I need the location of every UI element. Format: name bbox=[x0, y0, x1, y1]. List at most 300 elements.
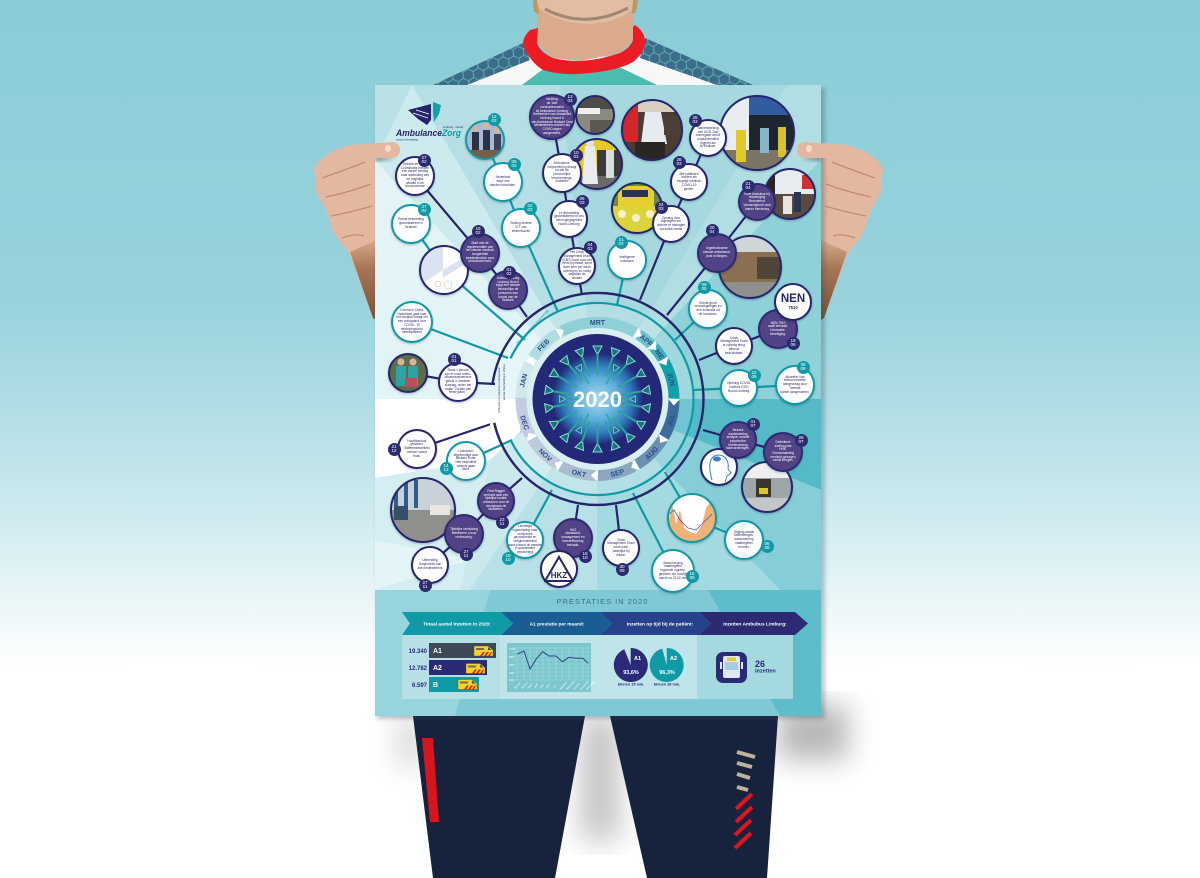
event 30/09 bbox=[602, 529, 640, 567]
photo: ambulance with protective suits bbox=[578, 140, 621, 188]
text: 28 bbox=[692, 114, 698, 120]
text: 06 bbox=[764, 540, 770, 546]
event 02/03: Sluiting diverse bbox=[510, 221, 532, 225]
event corona in China: verdrijvingsvoor bbox=[401, 327, 423, 331]
event 16/09: gesloten om huurlijk bbox=[659, 572, 687, 576]
ambubus count: inzetten bbox=[755, 668, 776, 674]
event crisis management team bbox=[715, 327, 753, 365]
event crisis management team: beschikbaar. bbox=[725, 351, 743, 355]
event 30/09: elkaar. bbox=[616, 553, 626, 557]
event 14/12: Lockdown: bbox=[458, 449, 474, 453]
event 04/03: situatie bbox=[572, 276, 582, 280]
event 28/07: Definitieve bbox=[776, 440, 790, 444]
event 22/06 bbox=[720, 369, 758, 407]
event 24/03: ingelegers om bbox=[661, 219, 681, 223]
event 19/02: Start met de bbox=[471, 241, 489, 245]
event 23/11: verhuist naar een bbox=[484, 493, 508, 497]
event 27/02 besmetting: 27 bbox=[421, 204, 427, 208]
event 28/03 samenwerking: ingezet als bbox=[700, 141, 716, 145]
event 28/07: sluiting post bbox=[775, 444, 791, 448]
event 02/03: ziekenhuizen bbox=[512, 229, 530, 233]
photo ring bbox=[741, 461, 793, 513]
year: 2020 bbox=[573, 387, 622, 412]
event 14/12: winkels gaan bbox=[457, 464, 475, 468]
event 27/11 verhuizing: verbouwing. bbox=[455, 535, 473, 539]
pie: A1 bbox=[614, 648, 648, 686]
timeline dial bbox=[489, 291, 706, 507]
event 23/11: nieuwbouw de bbox=[486, 504, 506, 508]
month pointers bbox=[523, 325, 680, 482]
text: 01 bbox=[506, 266, 512, 272]
pie: A2: 96,3% bbox=[659, 670, 675, 676]
event 22/06: 22 bbox=[751, 370, 757, 374]
event 30/06 bbox=[775, 365, 815, 405]
event 06/03: verzorgingsgebied bbox=[556, 218, 582, 222]
event 30/09: Management Team bbox=[607, 541, 635, 545]
logo: AmbulanceZorg bbox=[395, 128, 461, 138]
event 19/10: veiligheidsbeleid bbox=[513, 539, 537, 543]
person: left hand bbox=[314, 150, 376, 320]
event 19/06: Informatie- bbox=[770, 328, 786, 332]
event 01/02: Limburg Noord bbox=[497, 280, 519, 284]
event 10/03: persoonlijke bbox=[553, 172, 570, 176]
event 16/10: management en bbox=[561, 535, 585, 539]
event 16/10: 16 bbox=[582, 550, 588, 556]
event 27/11 uitbreiding: Zorgbureau van bbox=[419, 562, 441, 566]
photo: ambulance interior bbox=[577, 97, 613, 133]
photo ring bbox=[571, 138, 623, 190]
icon: HKZ logo bbox=[540, 550, 578, 588]
event 28/03 samenwerking: ongediversified bbox=[697, 137, 719, 141]
event 24/03: uniform te managen bbox=[657, 223, 685, 227]
event 14/12: 12 bbox=[443, 467, 449, 472]
photo: press conference bbox=[467, 122, 503, 158]
event 28/03 patiënten: COVID-19 bbox=[682, 183, 696, 187]
event 01/07: analyse: sociale bbox=[727, 435, 749, 439]
event 12/03 photo ring bbox=[465, 120, 505, 160]
ring: teal bbox=[510, 303, 693, 495]
photo ring bbox=[719, 95, 795, 171]
event 19/06: NEN 7510 bbox=[771, 321, 785, 325]
section heading: PRESTATIES IN 2020 bbox=[557, 597, 648, 606]
event 22/06: Noord-Limburg. bbox=[728, 389, 750, 393]
month labels: JUL bbox=[667, 412, 677, 428]
line chart: A1 per maand: februari bbox=[520, 680, 529, 690]
line chart: A1 per maand: december bbox=[585, 680, 596, 691]
left finger bbox=[317, 142, 400, 172]
event 01/02: Brabant bbox=[502, 298, 514, 302]
text: 01 bbox=[451, 358, 457, 363]
photo: garage building bbox=[742, 462, 792, 512]
event 28/03 patiënten: Alle patiënten bbox=[679, 172, 699, 176]
event 06/03: Noord-Limburg bbox=[558, 222, 580, 226]
event 14/12: Niet essentiële bbox=[456, 460, 476, 464]
event 27/02 besmetting: Brabant bbox=[405, 225, 417, 229]
event 21/12: gesloten. bbox=[411, 442, 423, 446]
bars: inzetten bbox=[409, 643, 496, 692]
text: 11 bbox=[464, 553, 468, 558]
event 30/06: aangevraag door bbox=[783, 382, 807, 386]
event 27/02 besmetting bbox=[391, 204, 431, 244]
line chart: A1 per maand: 92% bbox=[509, 678, 515, 682]
event 27/02 besmetting: 02 bbox=[421, 208, 427, 213]
line chart: A1 per maand: juli bbox=[551, 683, 557, 689]
event 14/12: Minister Rutte. bbox=[456, 456, 476, 460]
event 21/03: 03 bbox=[618, 241, 624, 246]
event corona in China: Nederland gaat naar bbox=[397, 312, 427, 316]
event 02/03: 03 bbox=[527, 207, 533, 212]
poster background rays bbox=[375, 85, 821, 590]
event 19/02: het nieuwe medisch bbox=[466, 248, 494, 252]
photo ring bbox=[388, 353, 428, 393]
event 06/03: geconstateerd in ons bbox=[554, 214, 584, 218]
event 13/03: Melding bbox=[546, 97, 558, 101]
line chart: A1 per maand: oktober bbox=[572, 682, 581, 691]
photo: office floor bbox=[392, 479, 454, 541]
pie: A1: A1 bbox=[634, 656, 641, 662]
event 21/04: 21 bbox=[745, 180, 751, 186]
event 27/11 uitbreiding bbox=[411, 546, 449, 584]
event 02/03 bbox=[501, 208, 541, 248]
event 30/06: kamer aangenomen. bbox=[780, 390, 810, 394]
photo ring bbox=[764, 168, 816, 220]
icon: ambubus bbox=[716, 652, 747, 683]
event 21/04 bbox=[738, 183, 776, 221]
event 01/07: 01 bbox=[750, 418, 756, 424]
event 27/02 directie: situatie in de bbox=[406, 181, 424, 185]
event 16/09: wacht na 22:00 uur. bbox=[659, 576, 687, 580]
ambubus count: 26 bbox=[755, 659, 765, 669]
event 14/12 bbox=[446, 441, 486, 481]
month labels: JAN bbox=[519, 373, 529, 388]
event 16/09: Aanscherping bbox=[663, 561, 683, 565]
event 27/02 directie: 27 bbox=[421, 154, 427, 160]
event 28/03 patiënten: 03 bbox=[676, 161, 682, 166]
event 28/03 samenwerking: AVRzdiuze. bbox=[700, 144, 716, 148]
event 19/06: 06 bbox=[790, 342, 796, 347]
event 04/03: 03 bbox=[587, 246, 593, 251]
event 23/11: ontworpen voor de bbox=[483, 500, 509, 504]
event 04/03 bbox=[558, 247, 596, 285]
inner pale band bbox=[530, 331, 666, 467]
small vertical note bbox=[497, 364, 506, 413]
text: 11 bbox=[500, 521, 504, 526]
event 04/03: Het Crisis bbox=[570, 250, 584, 254]
line chart: A1 per maand: 94% bbox=[509, 671, 515, 675]
event 19/02 bbox=[460, 233, 500, 273]
event crisis management team: afbouw bbox=[729, 347, 739, 351]
timeline dial: Uitbraak van COVID-19 wereldwijd bbox=[515, 309, 550, 346]
month labels bbox=[518, 320, 677, 480]
event 01/01: beter gaan." bbox=[449, 390, 467, 394]
event 24/03: Opvang voor bbox=[662, 216, 680, 220]
event 01/07: psychische bbox=[730, 439, 746, 443]
event 27/02 directie: een eerste overleg bbox=[402, 169, 428, 173]
event 19/10: verplichting bbox=[517, 550, 533, 554]
event 28/03 patiënten bbox=[670, 163, 708, 201]
line chart: A1 per maand: april bbox=[533, 682, 539, 689]
event 13/03: Gemeenten van Maastricht bbox=[533, 112, 571, 116]
event 21/04: Inzet Ambubus bij bbox=[744, 192, 770, 196]
logo: Limburg - Noord bbox=[443, 125, 464, 129]
event 21/03: Intelligente bbox=[619, 255, 635, 259]
line chart: A1 per maand: september bbox=[565, 679, 576, 691]
illustration ring bbox=[419, 245, 469, 295]
chart ring bbox=[667, 493, 717, 543]
text: 09 bbox=[619, 568, 625, 573]
event 01/07: aanbesteding bbox=[728, 432, 748, 436]
event 20/04: nieuwe ambulance- bbox=[703, 250, 731, 254]
event 22/06: 06 bbox=[751, 374, 757, 379]
event 16/09: 16 bbox=[689, 570, 695, 576]
event 28/07: HHK. bbox=[779, 447, 787, 451]
event 21/03 bbox=[607, 240, 647, 280]
pie: A2 bbox=[650, 648, 684, 686]
event 23/11: faciliteiten. bbox=[488, 507, 504, 511]
text: 06 bbox=[579, 196, 585, 200]
event 28/07 bbox=[763, 432, 803, 472]
event 19/02: beademhuiden voor bbox=[466, 256, 494, 260]
event 27/11 verhuizing bbox=[444, 514, 484, 554]
chevron: op tijd bbox=[600, 612, 711, 635]
event 28/03 samenwerking: toenegaan wordt bbox=[696, 133, 720, 137]
person: trousers bbox=[413, 716, 778, 878]
event 04/03: eerst bij elkaar, komt bbox=[562, 261, 592, 265]
event 21/03: lockdown bbox=[620, 259, 634, 263]
event 22/06: Opening COVID- bbox=[727, 381, 751, 385]
event 16/10: standaard: bbox=[565, 531, 581, 535]
event 01/01: Sinds 1 januari bbox=[447, 368, 469, 372]
text: 24 bbox=[658, 202, 664, 206]
event 30/09: komt weer bbox=[614, 545, 628, 549]
event 27/11 uitbreiding: 27 bbox=[422, 580, 428, 584]
text: 10 bbox=[505, 557, 511, 562]
chevron: A1 per maand bbox=[699, 612, 808, 635]
event 02/03: ICT van bbox=[515, 225, 527, 229]
event 13/03 bbox=[529, 94, 575, 140]
event 01/02: bands van de bbox=[498, 295, 518, 299]
event 27/02 directie: de ongelijke bbox=[406, 177, 424, 181]
event 06/05: verzoekgelegen en bbox=[695, 304, 721, 308]
event 30/06: Wetsvoorstellen bbox=[784, 378, 806, 382]
event 16/10: 10 bbox=[582, 555, 588, 560]
event 01/02: krijgt een nieuwe bbox=[496, 283, 520, 287]
event 28/03 patiënten: gezien. bbox=[684, 187, 694, 191]
event 01/07: 07 bbox=[750, 423, 756, 428]
event 06/08: Stijging aantal bbox=[734, 530, 754, 534]
event 14/12: afgekondigd door bbox=[454, 453, 478, 457]
event 23/11: tijdelijke locatie bbox=[485, 496, 507, 500]
event 04/03: Management Team bbox=[563, 254, 591, 258]
month labels: OKT bbox=[571, 469, 587, 480]
bars: inzetten: A1 bbox=[433, 648, 442, 655]
event 16/10: hercertificering bbox=[563, 539, 583, 543]
line chart: A1 per maand: november bbox=[579, 680, 590, 691]
event 19/02: congenitale bbox=[472, 252, 488, 256]
event 30/09: 30 bbox=[619, 564, 625, 568]
event 20/04: post in Bergen. bbox=[706, 254, 728, 258]
event 19/10: onderzoek bbox=[518, 532, 532, 536]
icon: NEN 7510 bbox=[774, 283, 812, 321]
month labels: SEP bbox=[610, 469, 626, 479]
chart: infection graph bbox=[668, 494, 716, 542]
event 04/03: dagelijks de bbox=[569, 272, 585, 276]
event 27/02 directie: Directie en Crisis bbox=[403, 162, 427, 166]
event 30/06: Akoestiel Van bbox=[785, 375, 805, 379]
event corona in China: Corona in China. bbox=[400, 308, 424, 312]
logo bbox=[395, 102, 464, 142]
text: 01 bbox=[451, 354, 457, 358]
small vertical note: eerste besmetting in China bbox=[502, 364, 506, 400]
pie: A1: binnen 15 min. bbox=[618, 682, 644, 686]
event 21/12: werken vanuit bbox=[407, 450, 427, 454]
photo: two colleagues bbox=[390, 355, 426, 391]
backdrop shadow bbox=[398, 705, 848, 841]
month labels: FEB bbox=[537, 338, 552, 353]
line chart: A1 per maand: maart bbox=[526, 682, 534, 690]
event 13/03: 03 bbox=[567, 98, 573, 103]
event 27/02 directie: Coördinator hebben bbox=[401, 166, 429, 170]
line chart: A1 per maand: augustus bbox=[558, 680, 569, 691]
event 28/03 samenwerking: 03 bbox=[692, 119, 698, 124]
bars: inzetten: 6.597 bbox=[412, 683, 428, 689]
event 04/03: overleg en zo nodig bbox=[563, 269, 591, 273]
event corona in China: een voorgaand voor bbox=[398, 319, 426, 323]
event 19/06: 19 bbox=[790, 338, 796, 342]
chevron: totaal bbox=[402, 612, 513, 635]
icon: head illustration bbox=[700, 448, 738, 486]
logo: zorg in beweging bbox=[396, 138, 418, 142]
text: 02 bbox=[527, 202, 533, 208]
line chart: A1 per maand: 98% bbox=[509, 655, 515, 659]
performance section background bbox=[375, 590, 821, 716]
pie: A1: 93,6% bbox=[623, 670, 639, 676]
event 13/03: van Ambulance Brabant Oost bbox=[531, 120, 573, 124]
bars: inzetten: B bbox=[433, 682, 438, 689]
event 06/05: een evaluatie uit bbox=[696, 308, 720, 312]
event 19/02: implementatie van bbox=[467, 245, 493, 249]
event 16/10: HKZ bbox=[570, 528, 576, 532]
event 24/03: via social media bbox=[660, 227, 682, 231]
event 27/11 verhuizing: Mektheren Locus bbox=[452, 531, 476, 535]
event crisis management team: Management Team bbox=[720, 339, 748, 343]
photo: ambulance post building bbox=[719, 236, 781, 298]
text: 04 bbox=[709, 229, 715, 234]
icon: NEN 7510: 7510 bbox=[788, 305, 798, 310]
event 01/02 bbox=[488, 270, 528, 310]
small vertical note: Uitbraak coronavirus in Nederland bbox=[497, 367, 501, 413]
event 19/06 bbox=[758, 309, 798, 349]
event 13/03: 13 bbox=[567, 94, 573, 98]
event 20/04 bbox=[697, 233, 737, 273]
event 16/09: 09 bbox=[689, 575, 695, 580]
event 12/03 photo ring: 03 bbox=[491, 118, 497, 123]
event 13/03: aangemerkt. bbox=[543, 131, 561, 135]
panels bbox=[402, 635, 793, 699]
event 21/04: kamer Merseveg bbox=[745, 207, 769, 211]
pie: A2: binnen 30 min. bbox=[654, 682, 680, 686]
event 19/10: gezondheids en bbox=[514, 535, 536, 539]
event 01/02: AmbulanceZorg bbox=[497, 276, 519, 280]
event 10/03: bij alle de bbox=[555, 168, 569, 172]
text: 09 bbox=[511, 158, 517, 164]
event 21/12: Staffmedewerkers bbox=[404, 446, 430, 450]
event 01/07 bbox=[719, 421, 757, 459]
event 13/03: bij Ambulance Limburg bbox=[536, 109, 568, 113]
event 28/03 samenwerking: Samenwerking bbox=[697, 126, 719, 130]
chevron: prestatie per maand: A1 prestatie per maand: bbox=[530, 622, 585, 628]
event 19/10: ingeschaling naar bbox=[512, 528, 538, 532]
event 21/04: verpleeging bbox=[749, 195, 765, 199]
event 01/01 bbox=[438, 362, 478, 402]
bars: inzetten: A2 bbox=[433, 665, 442, 672]
photo ring bbox=[611, 182, 663, 234]
event 10/03: hulpverlening draagt bbox=[548, 165, 576, 169]
event 01/07: Bezoek bbox=[733, 428, 743, 432]
event 27/02 directie: naar aanleiding van bbox=[401, 173, 429, 177]
event 28/07: 28 bbox=[798, 434, 804, 440]
event 06/08: maatregelen bbox=[735, 541, 753, 545]
icon: HKZ logo: HKZ bbox=[551, 571, 567, 580]
photo ring bbox=[390, 477, 456, 543]
event 01/07: beeldvorming bbox=[728, 443, 748, 447]
event 09/03: Nederland bbox=[496, 175, 510, 179]
event 14/12: dicht. bbox=[462, 467, 470, 471]
chevron: op tijd: Inzetten op tijd bij de patiënt: bbox=[627, 622, 694, 628]
event 01/01: lancemedewerkers bbox=[445, 375, 471, 379]
event 01/01: geluid in Janssen bbox=[446, 379, 470, 383]
event 21/04: Verwachtpunt Land bbox=[743, 203, 771, 207]
text: 21 bbox=[391, 444, 397, 448]
event 16/10 bbox=[553, 518, 593, 558]
event 09/03: stopt met bbox=[496, 179, 510, 183]
line chart: A1 per maand: mei bbox=[539, 683, 545, 689]
chevron: A1 per maand: Inzetten Ambubus Limburg: bbox=[723, 622, 787, 628]
event 01/07: fasevorderingen. bbox=[726, 446, 750, 450]
event 10/03: 03 bbox=[573, 154, 579, 159]
photo ring bbox=[575, 95, 615, 135]
poster shadow bbox=[377, 88, 825, 719]
event 27/02 directie: 02 bbox=[421, 159, 427, 164]
text: 12 bbox=[391, 448, 397, 453]
event 19/10: aans placed de meeste bbox=[509, 543, 541, 547]
photo: ambubus outside bbox=[765, 169, 815, 219]
month arcs bbox=[489, 291, 706, 507]
event 27/11 uitbreiding: alle medewerkers bbox=[418, 566, 442, 570]
event 06/05: de lockdown. bbox=[699, 312, 717, 316]
event 13/03: de 1ste bbox=[547, 101, 557, 105]
event 06/08: besmettingen, bbox=[734, 533, 754, 537]
chevron: totaal: Totaal aantal inzetten in 2020: bbox=[423, 622, 491, 628]
virus centre bbox=[532, 334, 662, 464]
event 24/03 bbox=[652, 205, 690, 243]
pie: A2: A2 bbox=[670, 656, 677, 662]
event 04/03: twee keer per week bbox=[563, 265, 591, 269]
event 28/07: Overschakeling bbox=[772, 451, 794, 455]
event 16/10: behaald. bbox=[567, 543, 579, 547]
ring: navy bbox=[492, 293, 703, 505]
text: 19 bbox=[475, 226, 481, 230]
connector lines teal bbox=[411, 140, 795, 571]
text: 30 bbox=[800, 362, 806, 366]
event 06/03: 03 bbox=[579, 200, 585, 205]
event 06/08: aanscherping bbox=[734, 537, 754, 541]
event 10/03 bbox=[542, 153, 582, 193]
event 16/09: maatregelen bbox=[664, 564, 682, 568]
line chart: A1 per maand: 100% bbox=[509, 647, 516, 651]
event 01/01: motto "Zorben van bbox=[445, 387, 471, 391]
event crisis management team: is volledig terug bbox=[723, 343, 745, 347]
